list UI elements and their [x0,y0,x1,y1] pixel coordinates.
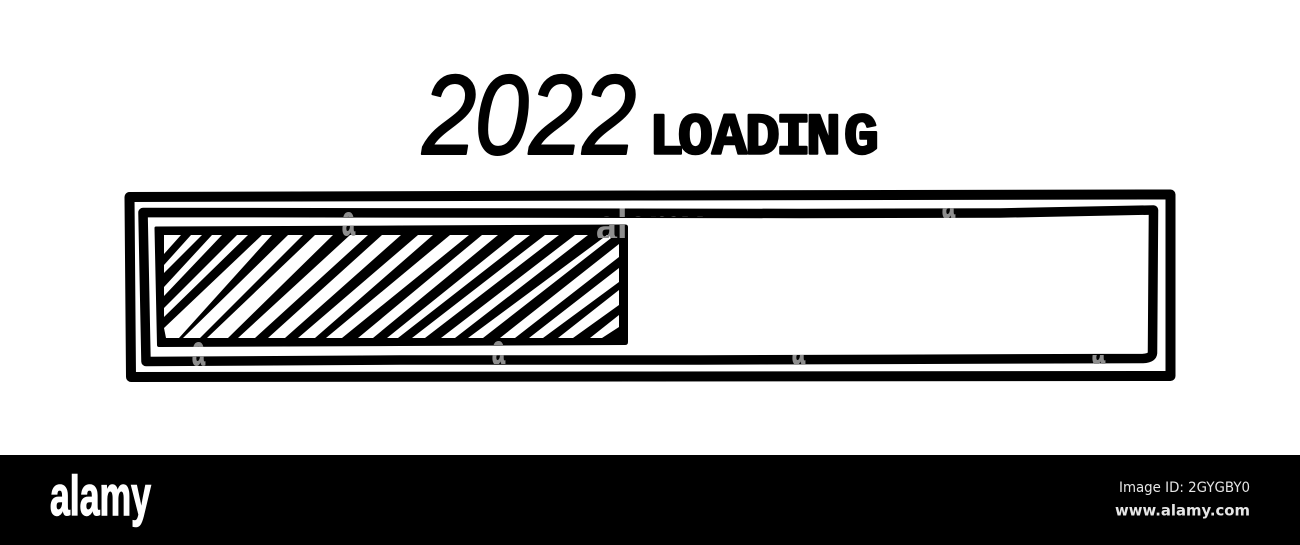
footer logo: alamy [50,464,151,527]
watermark: small marks [192,208,1106,366]
progress stripes [164,235,619,338]
inner frame [143,210,1154,362]
watermark: small marks: a [342,197,355,244]
watermark: alamy over bar: alamy [596,201,703,250]
watermark: small marks: a [492,326,505,373]
watermark: small marks: a [942,180,955,227]
website: www.alamy.com [1115,502,1250,520]
watermark: small marks: a [192,327,205,374]
heading: LOADING: LOADING [649,106,879,172]
image id: Image ID: 2GYGBY0 [1119,480,1250,496]
outer frame [130,194,1170,377]
title: 2022: 2022 [421,53,636,179]
watermark: small marks: a [792,326,805,373]
progress bar [130,194,1170,377]
progress fill [154,224,628,347]
watermark: small marks: a [1092,326,1105,373]
footer band [0,455,1300,545]
